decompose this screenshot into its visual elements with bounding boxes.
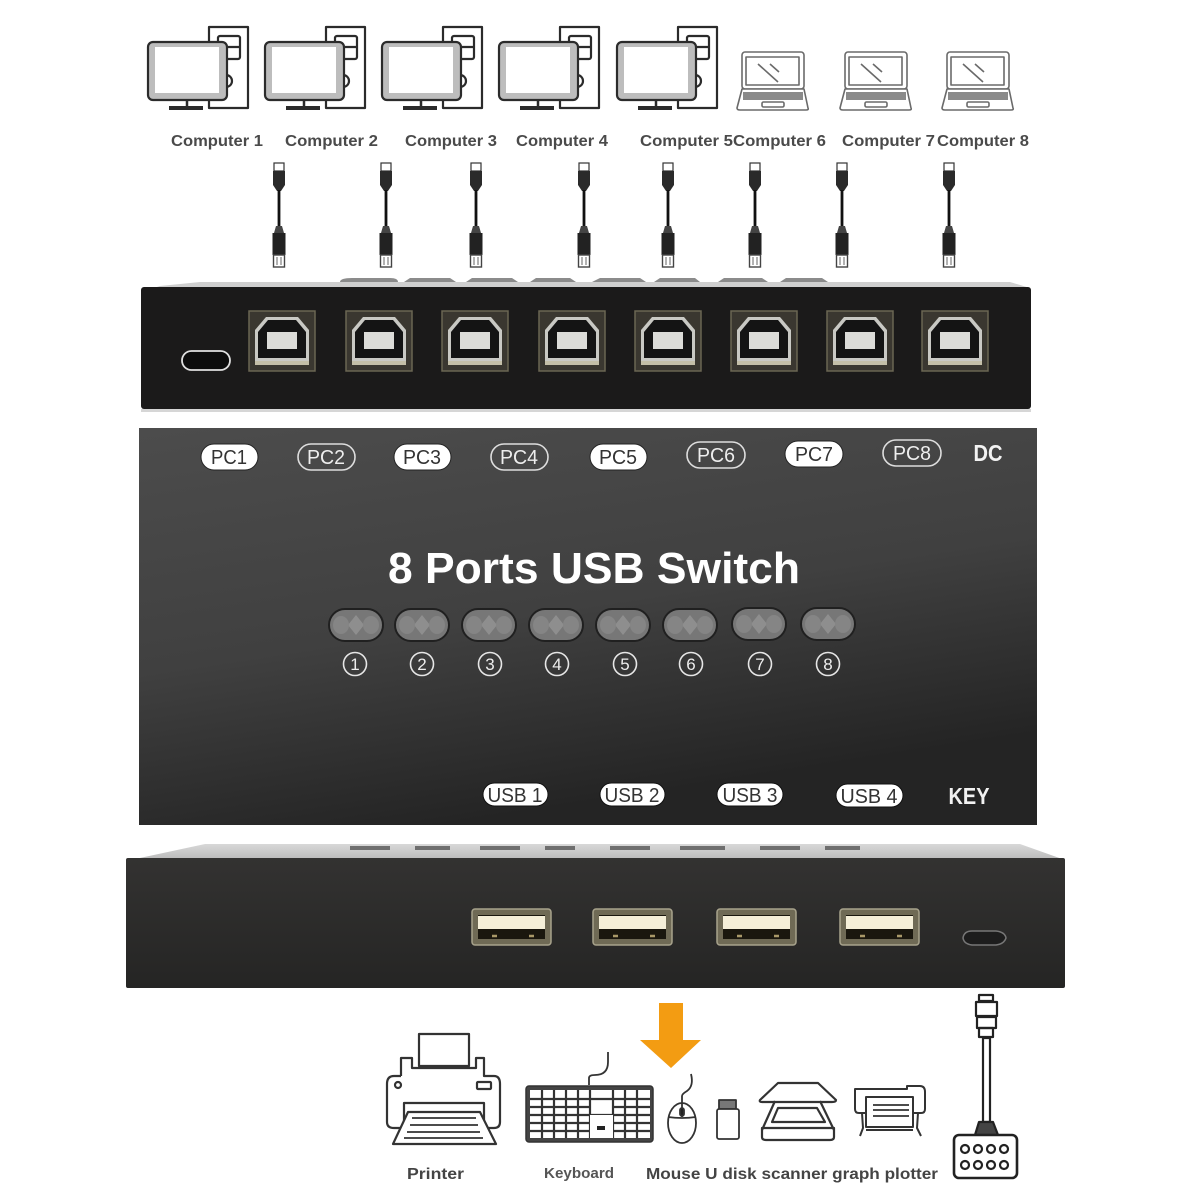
device labels — [407, 1165, 938, 1183]
panel: rear device with usb-b ports — [141, 278, 1031, 412]
pc labels: PC4 — [500, 447, 538, 469]
circled button numbers: 7 — [755, 655, 765, 674]
icon: micro usb key port — [963, 931, 1006, 945]
circled button numbers: 1 — [350, 655, 360, 674]
computer labels: Computer 6 — [733, 133, 826, 150]
usb labels — [483, 783, 903, 808]
computer labels: Computer 3 — [405, 133, 497, 150]
usb labels: USB 4 — [840, 786, 898, 808]
usb labels: USB 3 — [722, 785, 778, 807]
key label: KEY — [948, 783, 990, 809]
icon: graph plotter — [855, 1086, 925, 1136]
icon: orange down arrow — [640, 1003, 701, 1068]
device labels: Mouse U disk scanner graph plotter — [646, 1166, 938, 1183]
computer labels — [171, 133, 1029, 150]
icon: mouse — [668, 1074, 696, 1143]
usb-a port row — [472, 909, 919, 945]
pc labels: PC6 — [697, 445, 735, 467]
computer labels: Computer 4 — [516, 133, 608, 150]
device labels: Keyboard — [544, 1165, 614, 1182]
pc labels: PC8 — [893, 443, 931, 465]
usb cables — [272, 163, 956, 267]
usb labels: USB 1 — [488, 785, 542, 807]
dc label: DC — [974, 440, 1002, 466]
icon: key switch cable with 8-button pad — [954, 995, 1017, 1178]
panel: top face of switch — [139, 428, 1037, 825]
icon: scanner — [760, 1083, 836, 1140]
computer labels: Computer 2 — [285, 133, 378, 150]
icons: laptops computers 6-8 — [737, 52, 1013, 110]
pc labels: PC2 — [307, 447, 345, 469]
circled button numbers: 6 — [686, 655, 696, 674]
icon: printer — [387, 1034, 500, 1144]
usb-b port row — [249, 311, 988, 371]
pc labels: PC1 — [211, 447, 247, 469]
computer labels: Computer 5 — [640, 133, 733, 150]
circled button numbers: 8 — [823, 655, 833, 674]
icon: u disk — [717, 1100, 739, 1139]
icon: keyboard — [526, 1052, 653, 1142]
computer labels: Computer 1 — [171, 133, 263, 150]
circled button numbers: 3 — [485, 655, 495, 674]
pc labels: PC7 — [795, 444, 833, 466]
circled button numbers: 4 — [552, 655, 562, 674]
circled button numbers: 2 — [417, 655, 427, 674]
selector buttons — [329, 608, 855, 641]
usb labels: USB 2 — [604, 785, 660, 807]
icon: usb-c power port — [182, 351, 230, 370]
computer labels: Computer 7 — [842, 133, 935, 150]
panel: front device with usb-a ports — [126, 844, 1065, 988]
icons: desktop computers 1-5 — [148, 27, 717, 108]
title: 8 Ports USB Switch — [388, 544, 800, 593]
circled button numbers — [344, 652, 840, 676]
circled button numbers: 5 — [620, 655, 630, 674]
device labels: Printer — [407, 1166, 464, 1183]
computer labels: Computer 8 — [937, 133, 1029, 150]
pc labels — [201, 440, 941, 470]
pc labels: PC3 — [403, 447, 441, 469]
pc labels: PC5 — [599, 447, 637, 469]
